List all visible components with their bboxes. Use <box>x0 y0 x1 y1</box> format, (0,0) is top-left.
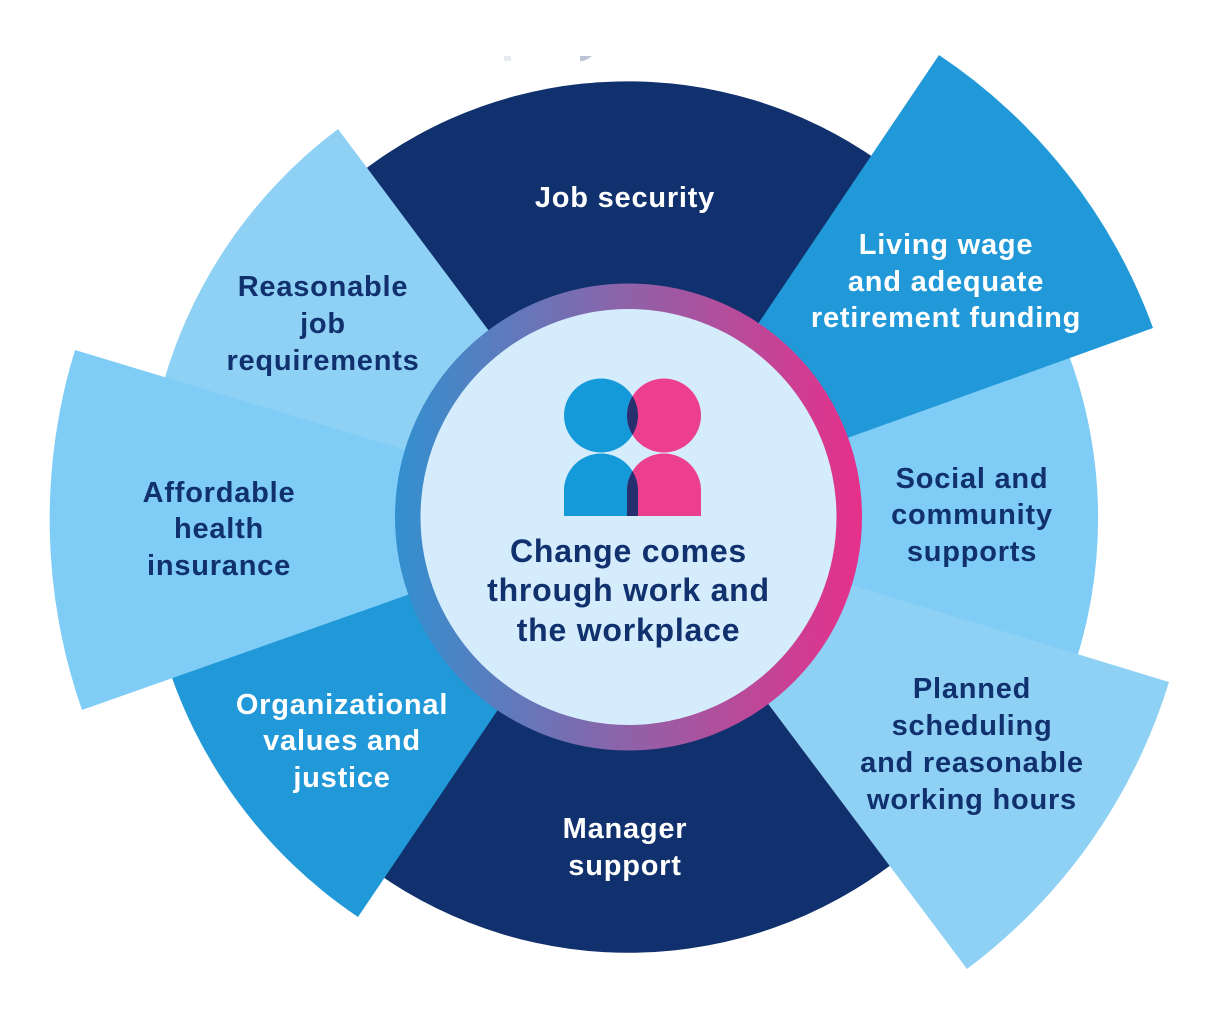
panel: Job security <box>360 81 878 517</box>
label: planned: Planned <box>913 673 1031 705</box>
icon: two overlapping people <box>564 378 701 516</box>
label: manager support: Manager <box>563 813 687 845</box>
label: reasonable: job <box>299 308 346 340</box>
label: living wage: Living wage <box>859 229 1033 261</box>
segment shape: job security <box>360 81 878 517</box>
label: social: community <box>891 499 1053 531</box>
segment shape: living wage <box>628 55 1153 517</box>
gradient ring <box>408 296 849 738</box>
label: planned: and reasonable <box>860 747 1084 779</box>
segment shape: reasonable <box>160 129 628 517</box>
label: social: supports <box>907 536 1037 568</box>
top scan artifact <box>504 56 592 61</box>
label: planned: working hours <box>866 784 1077 816</box>
label: reasonable: Reasonable <box>238 271 408 303</box>
centre heading: through work and <box>487 572 770 608</box>
panel: Organizational values and justice <box>163 517 628 917</box>
label: job security: Job security <box>535 182 715 214</box>
panel: Living wage and adequate retirement funding <box>628 55 1153 517</box>
segment shape: affordable <box>50 350 628 710</box>
segment shape: planned <box>628 517 1169 969</box>
segment shape: social <box>628 333 1098 689</box>
centre heading: the workplace <box>517 612 740 648</box>
centre panel <box>420 309 836 725</box>
panel: Planned scheduling and reasonable working hours <box>628 517 1169 969</box>
panel: Reasonable job requirements <box>160 129 628 517</box>
centre disc <box>420 309 836 725</box>
panel: Affordable health insurance <box>50 350 628 710</box>
label: organizational: Organizational <box>236 689 448 721</box>
segment shape: manager support <box>377 517 896 953</box>
label: organizational: values and <box>263 725 421 757</box>
panel: Manager support <box>377 517 896 953</box>
panel: Social and community supports <box>628 333 1098 689</box>
label: reasonable: requirements <box>226 345 420 377</box>
label: affordable: insurance <box>147 550 291 582</box>
label: living wage: retirement funding <box>811 302 1081 334</box>
label: manager support: support <box>568 850 682 882</box>
centre heading: Change comes <box>510 533 747 569</box>
label: planned: scheduling <box>892 710 1052 742</box>
label: living wage: and adequate <box>848 266 1044 298</box>
label: affordable: health <box>174 513 264 545</box>
label: affordable: Affordable <box>143 477 295 509</box>
segment shape: organizational <box>163 517 628 917</box>
label: organizational: justice <box>292 762 391 794</box>
label: social: Social and <box>896 463 1048 495</box>
